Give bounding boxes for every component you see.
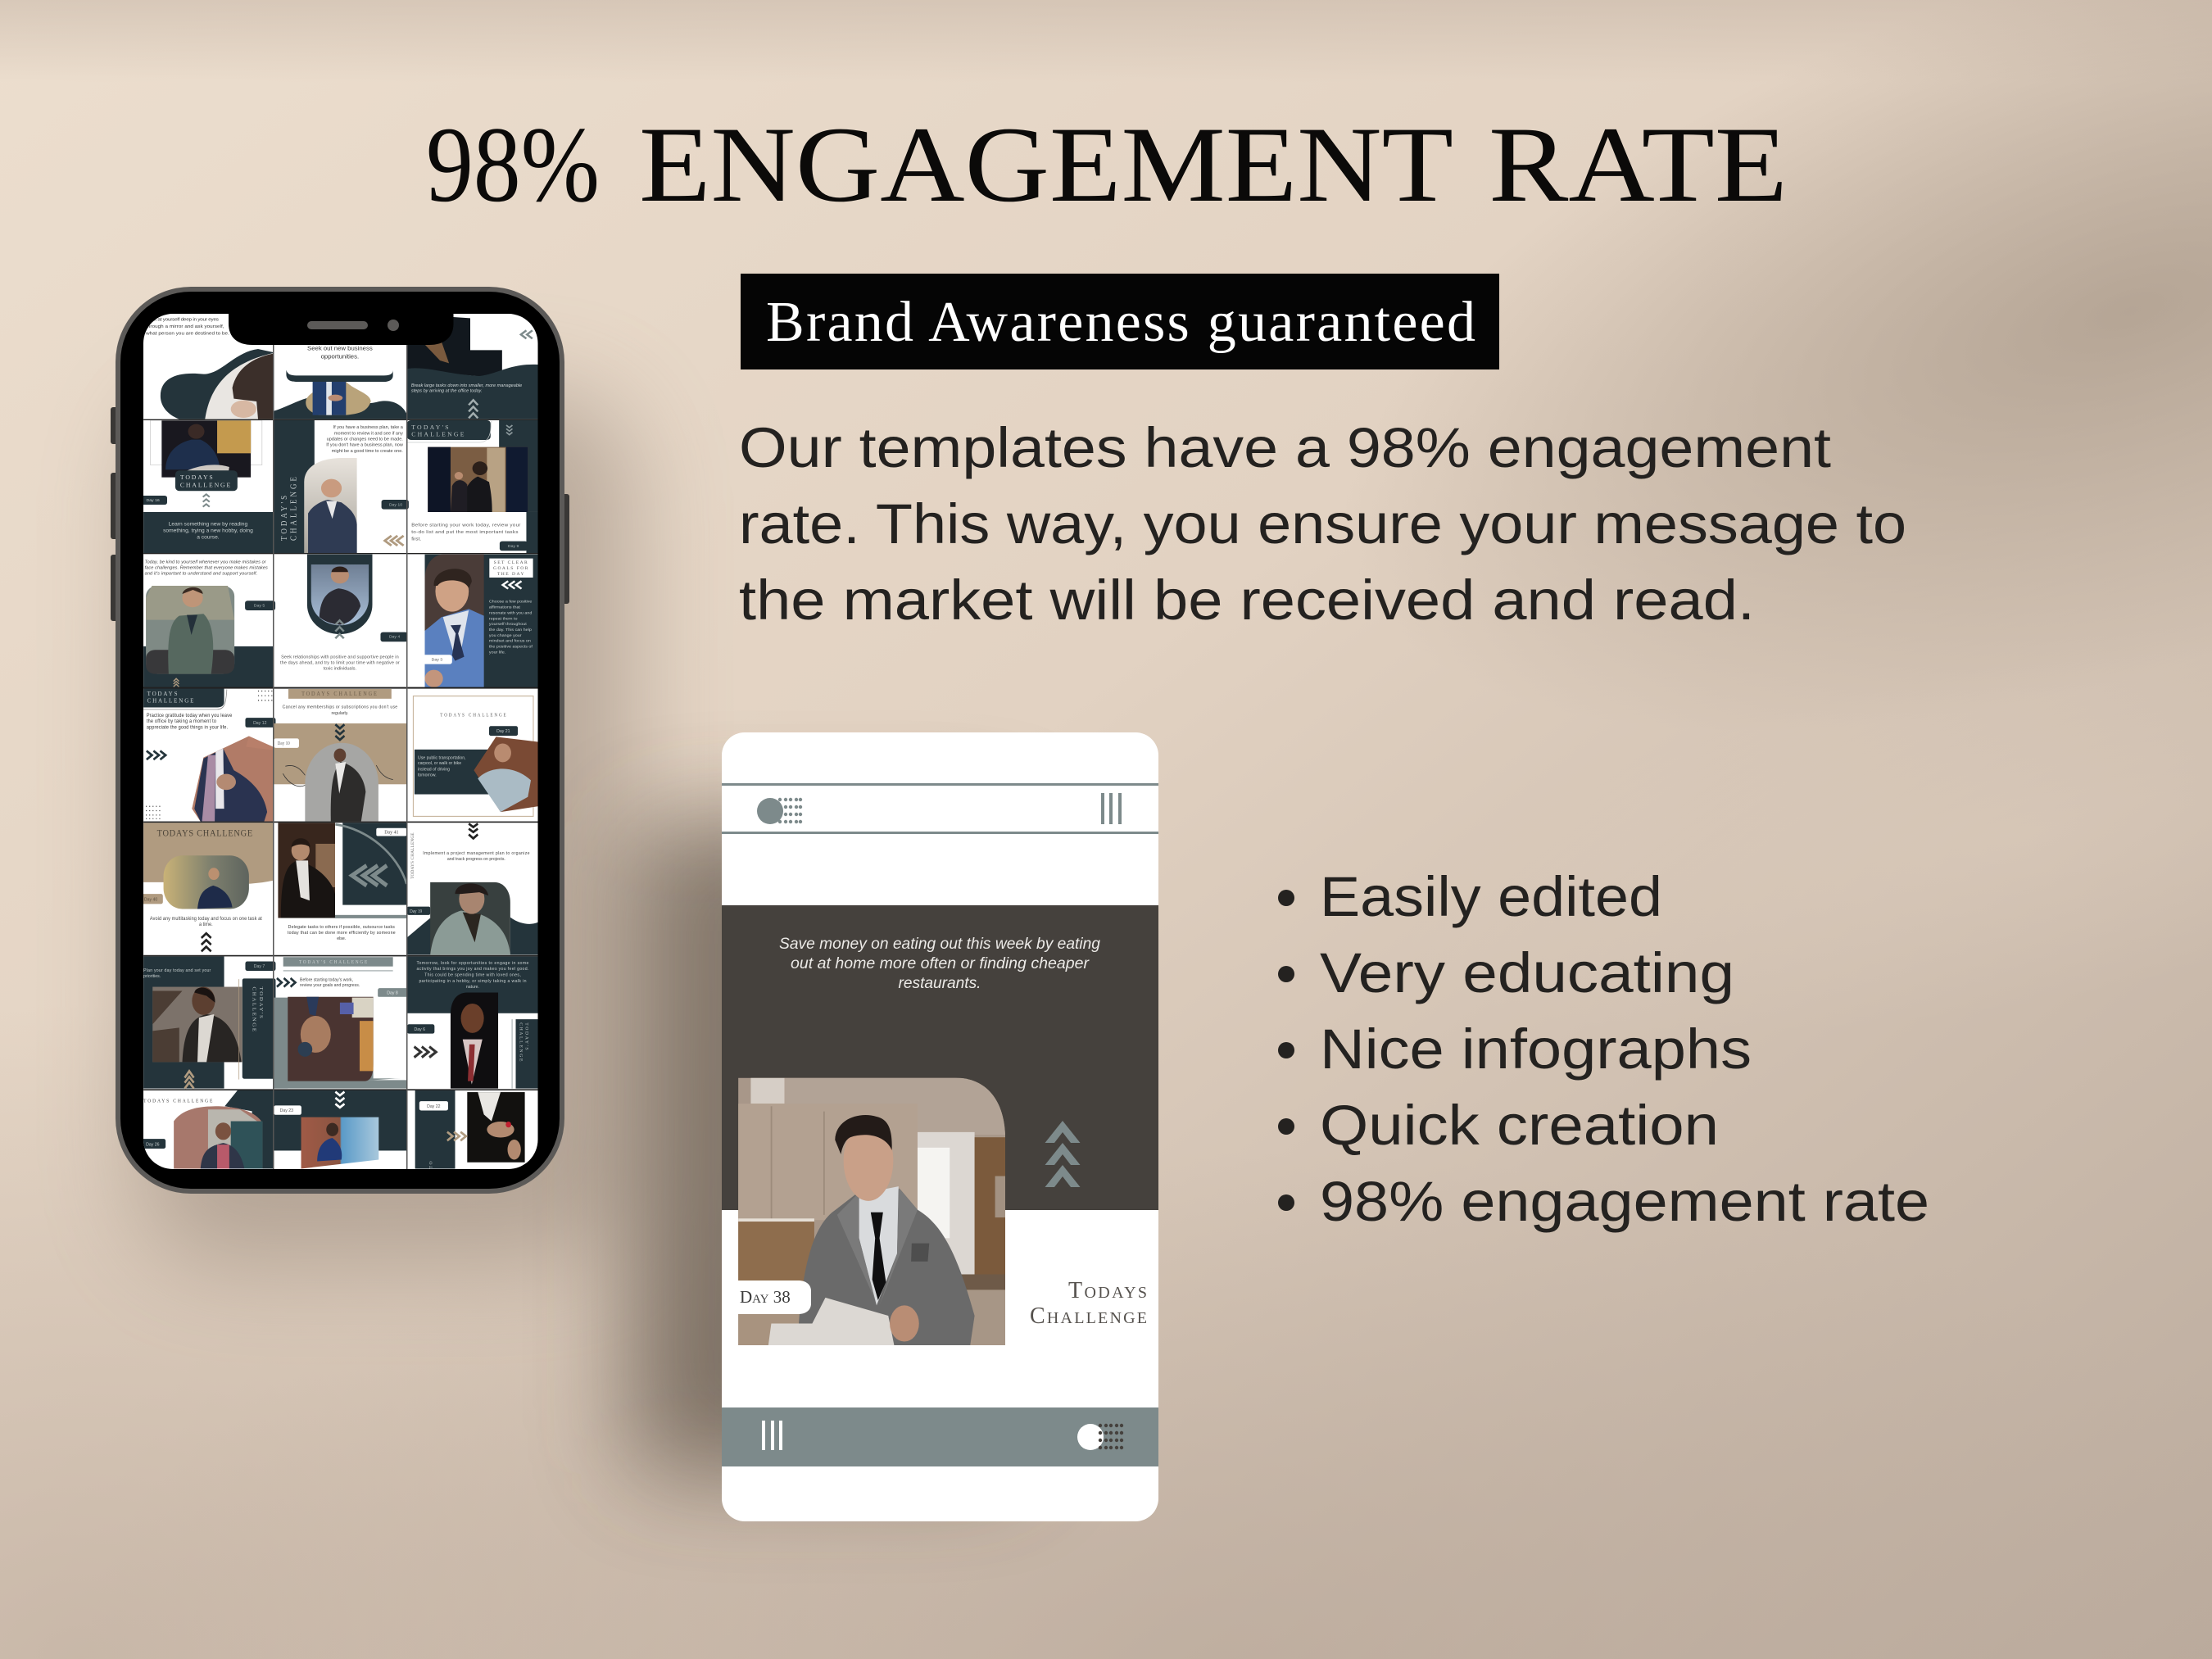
row 4 post 1: CHALLENGE [147,696,195,705]
row 6 post 3 [407,956,538,1089]
top stripe lines [722,783,1158,834]
row 3 post 1: Day 5 [254,604,265,609]
row 5 post 1: TODAYS CHALLENGE [157,828,253,839]
row 2 post 3 [407,420,538,554]
row 2 post 1: a course. [197,535,220,541]
row 3 post 3: resonate with you and [489,611,532,615]
paragraph: engagement description: the market will be received and read. [739,569,1755,632]
row 6 post 2: TODAY'S CHALLENGE [299,960,369,965]
row 4 post 2: regularly. [331,711,349,716]
row 1 post 1: what person you are destined to be. [145,332,229,336]
row 4 post 1: the office by taking a moment to [147,719,216,724]
row 2 post 2: TODAY'S [280,493,289,541]
row 3 post 3: the positive aspects of [489,645,533,650]
icon: white bars [762,1421,782,1450]
row 5 post 2: today that can be done more efficiently by someone [288,931,396,936]
row 7 post 1 [140,1090,274,1168]
row 3 post 3: repeat them to [489,617,518,621]
row 6 post 3: Day 6 [415,1027,425,1032]
row 2 post 3: first. [411,537,421,542]
row 3 post 3: affirmations that [489,605,521,610]
bullet list: benefits: Quick creation [1320,1094,1719,1157]
row 6 post 3: Tomorrow, look for opportunities to engage in some [417,961,528,966]
title: 98% [426,104,600,224]
row 7 post 2 [274,1090,406,1168]
sample post card: todays challenge [722,732,1158,1521]
day tag: Day 38 [740,1287,791,1307]
row 1 post 3 [407,314,538,419]
row 2 post 3: to-do list and put the most important tasks [411,530,518,535]
row 3 post 1: and it's important to understand and support yourself. [145,572,257,577]
grid rows 4 to 7 [140,687,538,1168]
row 3 post 1 [143,560,275,687]
challenge text: Save money on eating out this week by eating [779,936,1100,953]
icon: up chevrons [1045,1121,1080,1187]
row 6 post 1: TODAY'S [258,987,264,1020]
row 4 post 3: TODAYS CHALLENGE [440,713,508,718]
row 6 post 2: Before starting today's work, [300,977,354,983]
row 6 post 1: CHALLENGE [252,987,256,1033]
row 3 post 3: you change your [489,633,522,638]
bullet list: benefits [1278,865,1929,1233]
paragraph: engagement description: Our templates have a 98% engagement [739,416,1831,479]
bullet list: benefits: Nice infographs [1320,1018,1752,1081]
row 2 post 1: something, trying a new hobby, doing [163,528,253,534]
phone drop shadow [139,393,631,1262]
row 1 post 2: Seek out new business [307,345,373,352]
row 3 post 3: your life. [489,650,505,655]
row 2 post 3: Before starting your work today, review your [411,524,520,528]
todays challenge label [1030,1278,1147,1329]
row 2 post 1: CHALLENGE [180,482,232,489]
row 3 post 3: the day. This can help [489,628,532,632]
phone notch [229,314,454,345]
challenge text: out at home more often or finding cheaper [791,955,1090,972]
row 1 post 2: opportunities. [321,353,359,360]
icon: white circle with dark dots [1077,1424,1123,1450]
row 3 post 3: Day 3 [432,658,442,663]
dark panel [722,905,1158,1210]
row 2 post 2: Day 10 [389,503,402,507]
row 3 post 3: yourself throughout [489,622,527,627]
row 3 post 1: face challenges. Remember that everyone makes mistakes [145,566,268,570]
row 6 post 3: activity that brings you joy and makes you feel good. [417,967,529,972]
row 4 post 3: Use public transportation, [418,755,466,760]
row 5 post 3: TODAYS CHALLENGE [410,832,415,879]
row 4 post 1: Practice gratitude today when you leave [147,714,232,718]
row 7 post 2: Day 23 [280,1108,293,1113]
row 4 post 1: TODAYS [147,690,179,697]
row 5 post 2: Delegate tasks to others if possible, outsource tasks [288,925,395,930]
row 2 post 2: might be a good time to create one. [332,449,403,454]
row 2 post 2: moment to review it and see if any [334,432,403,436]
row 5 post 1: Avoid any multitasking today and focus on one task at [150,917,262,922]
paragraph: engagement description: rate. This way, you ensure your message to [739,492,1906,555]
row 6 post 3: nature. [466,985,479,990]
row 2 post 2: If you don't have a business plan, now [326,443,403,448]
row 2 post 1 [140,420,274,554]
row 4 post 1: Day 12 [253,721,266,726]
row 4 post 2: TODAYS CHALLENGE [301,691,378,697]
icon: circle with dot grid [757,798,802,824]
photo: man reading papers [738,1078,1005,1345]
row 6 post 1: Day 7 [254,964,265,969]
row 2 post 2 [274,420,409,554]
row 2 post 3: Day 9 [508,544,519,549]
row 6 post 2: Day 8 [387,990,398,996]
row 3 post 2: the days ahead, and try to limit your time with negative or [280,661,400,665]
row 6 post 3: CHALLENGE [519,1022,523,1063]
row 4 post 2 [274,689,406,822]
row 5 post 2: Day 41 [384,829,399,836]
row 3 post 2: Day 4 [389,635,401,640]
row 5 post 1: a time. [199,922,213,927]
grid rows 1 to 3 [140,314,538,688]
bullet list: benefits: Very educating [1320,941,1734,1004]
row 7 post 3: Day 22 [427,1104,440,1109]
row 2 post 3: CHALLENGE [411,431,466,438]
title: RATE [1489,104,1788,224]
row 1 post 1 [145,318,274,419]
challenge text: restaurants. [898,975,981,992]
row 3 post 3: mindset and focus on [489,639,531,644]
row 7 post 1: TODAYS CHALLENGE [143,1099,214,1104]
row 2 post 2: CHALLENGE [290,474,299,541]
row 4 post 1: appreciate the good things in your life. [147,725,228,731]
row 2 post 3: TODAY'S [411,424,451,431]
row 7 post 3 [415,1090,525,1168]
row 4 post 3: carpool, or walk or bike [418,761,461,766]
row 4 post 3: Day 21 [496,729,510,734]
row 5 post 3: Day 19 [410,909,422,914]
row 3 post 3: THE DAY [497,572,525,577]
phone mockup [111,287,569,1194]
row 5 post 3 [407,823,538,954]
row 2 post 1: Day 16 [146,498,160,503]
row 1 post 1: Look at yourself deep in your eyes [146,318,219,323]
row 3 post 2: toxic individuals. [324,666,356,671]
row 4 post 3 [413,696,538,816]
card drop shadow [631,819,1024,1475]
title [426,104,1788,224]
row 6 post 3: TODAY'S [524,1022,528,1051]
todays challenge label: Todays [1068,1278,1147,1303]
row 6 post 3: participating in a hobby, or simply taking a walk in [419,979,526,984]
row 6 post 1 [143,956,275,1089]
row 4 post 3: instead of driving [418,767,450,773]
row 5 post 2 [278,823,406,941]
row 3 post 1: Today, be kind to yourself whenever you make mistakes or [145,560,266,565]
row 4 post 2: Cancel any memberships or subscriptions you don't use [283,705,397,710]
phone screen: post grid [140,314,538,1169]
phone body [116,287,564,1194]
row 3 post 3 [407,555,538,687]
challenge text [779,936,1100,992]
phone side buttons [111,407,569,621]
row 3 post 3: SET CLEAR [494,560,528,565]
row 3 post 3: Choose a few positive [489,600,532,605]
row 3 post 2: Seek relationships with positive and supportive people in [281,655,399,660]
row 6 post 1: Plan your day today and set your [143,968,211,973]
row 1 post 1: through a mirror and ask yourself, [146,324,224,329]
todays challenge label: Challenge [1030,1303,1147,1329]
row 6 post 1: priorities. [143,974,161,979]
paragraph: engagement description [739,416,1906,632]
row 3 post 2 [280,555,408,671]
row 4 post 1 [143,688,275,822]
row 6 post 2 [274,957,408,1089]
day tag [738,1281,811,1314]
row 7 post 1: Day 26 [146,1142,159,1147]
bullet list: benefits: Easily edited [1320,865,1662,928]
badge: brand awareness: Brand Awareness guaranteed [766,291,1475,354]
badge: brand awareness [741,274,1499,369]
row 5 post 1 [140,823,274,951]
row 5 post 3: Implement a project management plan to organize [423,851,530,856]
row 6 post 2: review your goals and progress. [300,983,360,988]
row 1 post 2 [274,345,406,419]
row 5 post 3: and track progress on projects. [447,857,505,862]
row 2 post 2: If you have a business plan, take a [333,425,403,430]
row 5 post 2: else. [337,936,347,941]
row 5 post 1: Day 40 [144,897,157,902]
title: ENGAGEMENT [639,104,1453,224]
row 3 post 3: GOALS FOR [493,566,529,571]
row 7 post 3: TO [429,1160,433,1168]
row 6 post 3: This could be spending time with loved ones, [424,972,521,978]
row 2 post 1: TODAYS [180,474,215,481]
row 1 post 3: steps by arriving at the office today. [411,389,482,394]
bullet list: benefits: 98% engagement rate [1320,1170,1929,1233]
row 1 post 3: Break large tasks down into smaller, more manageable [411,383,522,388]
icon: three vertical bars [1101,793,1122,824]
row 2 post 2: updates or changes need to be made. [327,437,403,442]
bottom strip [722,1407,1158,1466]
row 4 post 2: Day 10 [278,741,290,746]
row 4 post 3: tomorrow. [418,773,437,778]
row 2 post 1: Learn something new by reading [169,522,248,527]
